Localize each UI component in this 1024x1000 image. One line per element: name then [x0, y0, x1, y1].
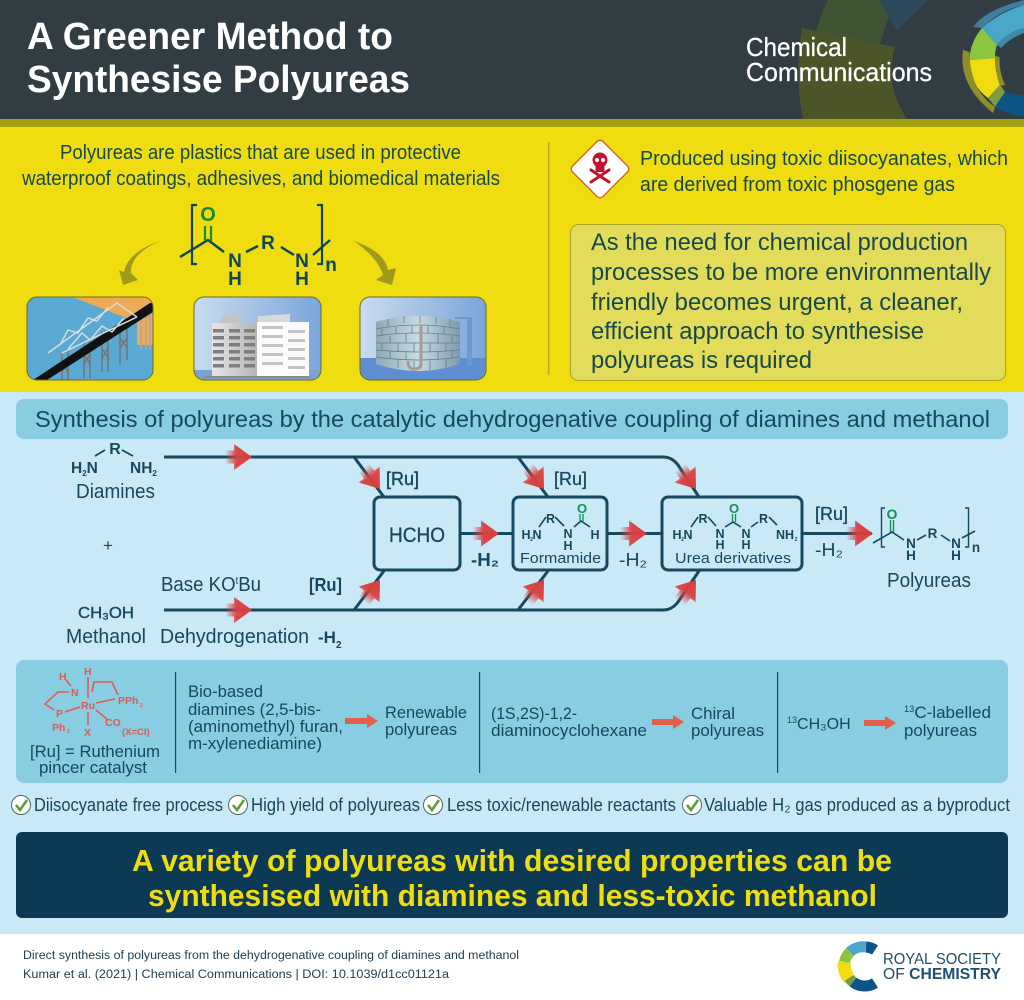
polyureas product: H — [951, 548, 961, 563]
citation: Direct synthesis of polyureas from the dehydrogenative coupling of diamines and methanol — [23, 950, 519, 962]
box: formamide: H — [563, 539, 573, 553]
polyureas product: N — [906, 536, 916, 551]
box: formamide: R — [546, 512, 555, 526]
polyurea structure: H — [295, 269, 309, 290]
box: urea derivatives: N — [683, 528, 693, 542]
box: urea derivatives: H — [741, 538, 751, 552]
warning text: are derived from toxic phosgene gas — [640, 173, 955, 196]
labelled methanol: CH₃OH — [797, 716, 851, 733]
ruthenium catalyst structure: Ru — [81, 700, 95, 712]
base and dehydrogenation labels: 2 — [336, 640, 342, 651]
card outline: bridge — [27, 297, 153, 380]
panel: synthesis background — [0, 392, 1024, 934]
box: urea derivatives: N — [715, 527, 725, 541]
diamines reactant: H — [71, 460, 82, 477]
box: urea derivatives: O — [729, 501, 739, 516]
journal name — [746, 32, 932, 87]
intro text: waterproof coatings, adhesives, and biomedical materials — [21, 167, 500, 190]
ruthenium catalyst structure: P — [56, 708, 63, 720]
Ru and H2 labels: -H₂ — [815, 540, 843, 560]
arrow: labelled — [864, 716, 896, 730]
callout: need for greener approach: polyureas is required — [591, 347, 812, 374]
catalyst caption: pincer catalyst — [39, 758, 147, 777]
reaction lines — [164, 457, 872, 610]
title: A Greener Method to — [27, 16, 393, 58]
box: formamide: H — [521, 528, 531, 542]
base and dehydrogenation labels: -H — [318, 628, 336, 647]
methanol reactant: Methanol — [66, 626, 146, 648]
polyureas product: R — [928, 526, 938, 541]
card outline: storage tank — [360, 297, 486, 380]
ruthenium catalyst structure: 2 — [140, 703, 143, 709]
box: HCHO — [374, 497, 460, 570]
benefits checklist — [12, 795, 1010, 815]
base and dehydrogenation labels: Base KO — [161, 574, 241, 596]
Ru and H2 labels — [309, 469, 848, 595]
polyureas product: O — [887, 506, 898, 522]
polyureas product: H — [906, 548, 916, 563]
intro text — [21, 141, 500, 190]
renewable polyureas — [385, 704, 467, 739]
polyureas product: N — [951, 536, 961, 551]
polyurea structure: O — [200, 204, 216, 226]
image: building — [194, 297, 321, 380]
box: formamide: Formamide — [520, 550, 601, 567]
intro text: Polyureas are plastics that are used in protective — [60, 141, 461, 164]
diamines reactant: 2 — [82, 469, 87, 478]
base and dehydrogenation labels: Bu — [238, 574, 261, 596]
synthesis heading: Synthesis of polyureas by the catalytic dehydrogenative coupling of diamines and methanol — [35, 406, 990, 432]
icon: toxic warning diamond — [570, 139, 630, 199]
ruthenium catalyst structure — [45, 666, 150, 739]
box: urea derivatives: N — [741, 527, 751, 541]
polyureas product: n — [972, 540, 980, 555]
arrow: left usage — [119, 241, 160, 285]
labelled polyureas: polyureas — [904, 722, 977, 740]
chiral polyureas: Chiral — [691, 705, 735, 723]
bio-based diamines: m-xylenediamine) — [188, 735, 322, 753]
logo: Royal Society of Chemistry — [844, 947, 1001, 986]
callout: need for greener approach: friendly becomes urgent, a cleaner, — [591, 289, 963, 316]
bio-based diamines — [188, 683, 343, 753]
base and dehydrogenation labels: Dehydrogenation — [160, 626, 309, 648]
image: bridge — [27, 297, 153, 380]
polyurea structure — [180, 204, 337, 290]
polyurea structure: N — [228, 251, 242, 272]
ruthenium catalyst structure: N — [71, 687, 79, 699]
callout: need for greener approach: processes to be more environmentally — [591, 259, 991, 286]
chiral polyureas — [691, 705, 764, 740]
Ru and H2 labels: [Ru] — [554, 469, 587, 489]
logo: Royal Society of Chemistry: ROYAL SOCIETY — [883, 951, 1001, 968]
citation: Kumar et al. (2021) | Chemical Communications | DOI: 10.1039/d1cc01121a — [23, 969, 450, 981]
reaction scheme — [66, 441, 980, 651]
panel: catalyst and substrate scope — [16, 660, 1008, 783]
box: urea derivatives: R — [698, 512, 708, 526]
bio-based diamines: (aminomethyl) furan, — [188, 718, 343, 736]
Ru and H2 labels: [Ru] — [309, 575, 342, 595]
chiral diamine: (1S,2S)-1,2- — [491, 705, 577, 723]
box: urea derivatives: 2 — [795, 537, 798, 543]
ruthenium catalyst structure: (X=Cl) — [122, 727, 150, 738]
diamines reactant: R — [109, 441, 121, 458]
chiral diamine: diaminocyclohexane — [491, 722, 647, 740]
base and dehydrogenation labels: t — [236, 576, 238, 587]
box: urea derivatives: NH — [776, 528, 794, 542]
diamines reactant: N — [87, 460, 98, 477]
red flow arrows — [225, 444, 873, 623]
box: formamide: O — [577, 501, 587, 516]
arrow: right usage — [354, 241, 396, 285]
polyureas product — [873, 506, 980, 592]
callout: need for greener approach: As the need for chemical production — [591, 229, 968, 256]
ruthenium catalyst structure: 2 — [67, 729, 70, 735]
ruthenium catalyst structure: CO — [105, 717, 121, 729]
image: storage tank — [360, 297, 486, 380]
benefit: diisocyanate free: Diisocyanate free process — [34, 795, 223, 815]
methanol reactant: CH₃OH — [78, 605, 134, 622]
polyurea structure: R — [261, 233, 275, 254]
polyureas product: Polyureas — [887, 570, 971, 592]
logo: Royal Society of Chemistry: OF CHEMISTRY — [883, 966, 1001, 983]
box: urea derivatives: H — [715, 538, 725, 552]
conclusion banner: synthesised with diamines and less-toxic methanol — [148, 878, 877, 913]
polyurea structure: H — [228, 269, 242, 290]
bio-based diamines: diamines (2,5-bis- — [188, 701, 321, 719]
polyurea structure: N — [295, 251, 309, 272]
callout: need for greener approach — [570, 224, 1006, 380]
catalyst caption — [30, 742, 160, 777]
ruthenium catalyst structure: Ph — [52, 722, 65, 734]
box: HCHO: HCHO — [389, 524, 445, 547]
synthesis heading — [16, 399, 1008, 439]
renewable polyureas: Renewable — [385, 704, 467, 722]
box: formamide: N — [563, 527, 573, 541]
box: formamide — [513, 497, 607, 570]
title: Synthesise Polyureas — [27, 59, 410, 101]
labelled methanol: 13 — [787, 715, 797, 725]
benefit: high yield: High yield of polyureas — [251, 795, 420, 815]
Ru and H2 labels: -H₂ — [471, 550, 499, 570]
warning text: Produced using toxic diisocyanates, which — [640, 147, 1008, 170]
labelled polyureas: 13 — [904, 704, 914, 714]
panel: yellow introduction — [0, 119, 1024, 392]
ruthenium catalyst structure: H — [84, 666, 92, 678]
decorative large ring — [798, 0, 928, 119]
citation — [23, 950, 519, 981]
diamines reactant: NH — [130, 460, 152, 477]
renewable polyureas: polyureas — [385, 721, 457, 739]
diamines reactant: 2 — [152, 469, 157, 478]
ruthenium catalyst structure: X — [84, 727, 91, 739]
Ru and H2 labels: [Ru] — [815, 504, 848, 524]
callout: need for greener approach: efficient approach to synthesise — [591, 318, 924, 345]
benefit: less toxic: Less toxic/renewable reactants — [447, 795, 676, 815]
ruthenium catalyst structure: PPh — [118, 695, 138, 707]
base and dehydrogenation labels — [160, 574, 342, 651]
title — [27, 16, 410, 101]
plus sign: + — [103, 536, 113, 555]
box: formamide: 2 — [530, 537, 533, 543]
Ru and H2 labels: [Ru] — [386, 469, 419, 489]
bio-based diamines: Bio-based — [188, 683, 263, 701]
chiral polyureas: polyureas — [691, 722, 764, 740]
journal name: Communications — [746, 57, 932, 87]
conclusion banner — [16, 832, 1008, 918]
box: urea derivatives: H — [672, 528, 682, 542]
catalyst caption: [Ru] = Ruthenium — [30, 742, 160, 761]
diamines reactant — [71, 441, 157, 503]
warning text — [640, 147, 1008, 196]
box: urea derivatives: R — [759, 512, 768, 526]
labelled polyureas: C-labelled — [914, 704, 991, 722]
card outline: building — [194, 297, 321, 380]
box: formamide: H — [590, 528, 600, 542]
box: formamide: N — [532, 528, 542, 542]
footer — [0, 934, 1024, 1000]
labelled polyureas — [904, 704, 991, 740]
journal logo ring — [962, 0, 1024, 116]
box: urea derivatives: Urea derivatives — [675, 550, 791, 567]
diamines reactant: Diamines — [76, 481, 155, 503]
box: urea derivatives: 2 — [681, 537, 684, 543]
conclusion banner: A variety of polyureas with desired properties can be — [132, 843, 892, 878]
Ru and H2 labels: -H₂ — [619, 550, 647, 570]
box: urea derivatives — [662, 497, 802, 570]
polyurea structure: n — [325, 255, 337, 276]
header band — [0, 0, 1024, 120]
methanol reactant — [66, 605, 146, 648]
arrow: renewable — [345, 714, 378, 728]
ruthenium catalyst structure: H — [59, 671, 67, 683]
chiral diamine — [491, 705, 647, 740]
journal name: Chemical — [746, 32, 847, 62]
arrow: chiral — [652, 715, 684, 729]
